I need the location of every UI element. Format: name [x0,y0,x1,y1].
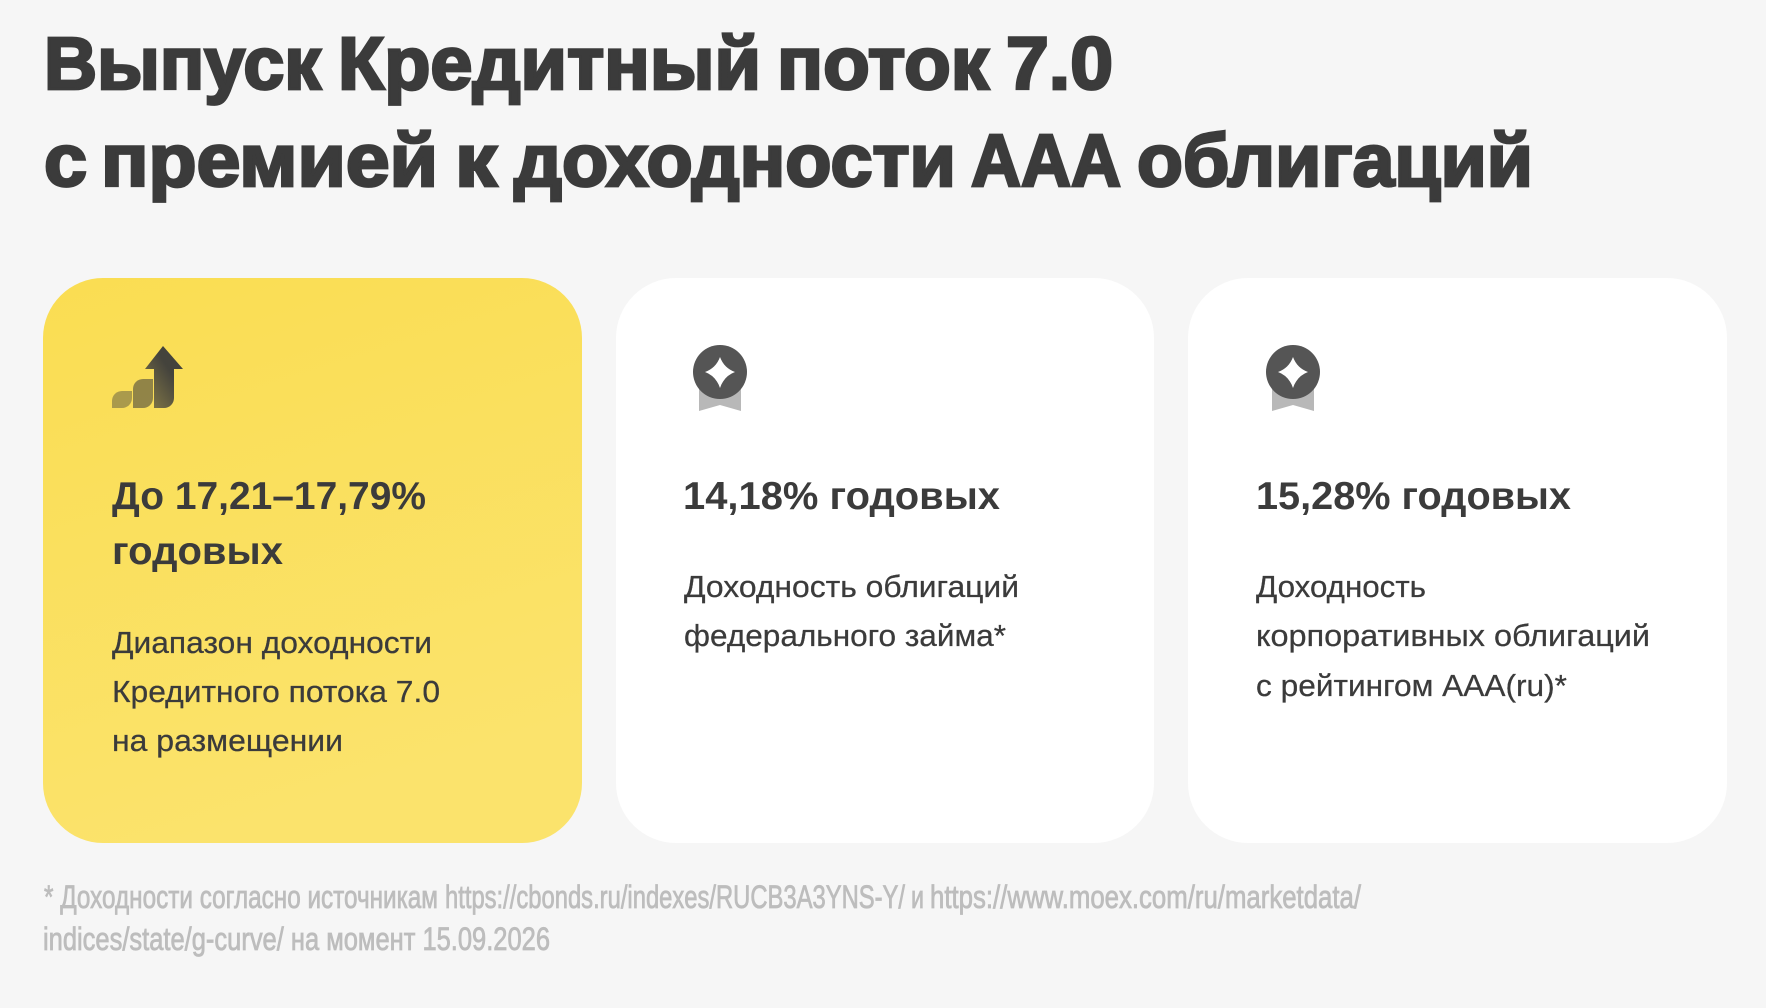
footnote: * Доходности согласно источникам [44,879,438,915]
icon: rising bars with arrow [112,346,183,408]
heading: federal yield: 14,18% годовых [683,475,1000,518]
text: federal description: федерального займа* [684,618,1006,653]
icon: badge with star [693,345,747,411]
title: с [44,119,87,202]
title: ААА [971,119,1121,202]
footnote: https://cbonds.ru/indexes/RUCB3A3YNS-Y/ [445,879,905,915]
footnote [43,879,1361,957]
heading: yield range: До 17,21–17,79% [112,475,426,518]
heading: yield range: годовых [112,530,283,573]
text: range description: Кредитного потока 7.0 [112,674,440,709]
text: corporate description: Доходность [1256,569,1426,604]
text: corporate description: корпоративных облигаций [1256,618,1650,653]
footnote: и [911,879,924,915]
title: Выпуск [44,22,322,105]
title: доходности [514,119,956,202]
footnote: indices/state/g-curve/ на момент 15.09.2026 [43,921,550,957]
footnote: https://www.moex.com/ru/marketdata/ [930,879,1361,915]
title: 7.0 [1006,22,1113,105]
icon: badge with star [1266,345,1320,411]
text: federal description: Доходность облигаций [684,569,1019,604]
title [44,22,1533,202]
text: federal description [684,569,1019,653]
text: range description: Диапазон доходности [112,625,432,660]
heading: corporate yield: 15,28% годовых [1256,475,1571,518]
title: поток [777,22,990,105]
text: range description: на размещении [112,723,343,758]
panel: federal loan bonds [616,278,1154,843]
text: corporate description [1256,569,1650,703]
panel: credit flow yield [43,278,582,843]
panel: corporate AAA bonds [1188,278,1727,843]
title: Кредитный [338,22,761,105]
title: облигаций [1137,119,1533,202]
heading: yield range [112,475,426,573]
title: к [455,119,498,202]
title: премией [101,119,438,202]
text: corporate description: с рейтингом ААА(ru)* [1256,668,1567,703]
text: range description [112,625,440,758]
